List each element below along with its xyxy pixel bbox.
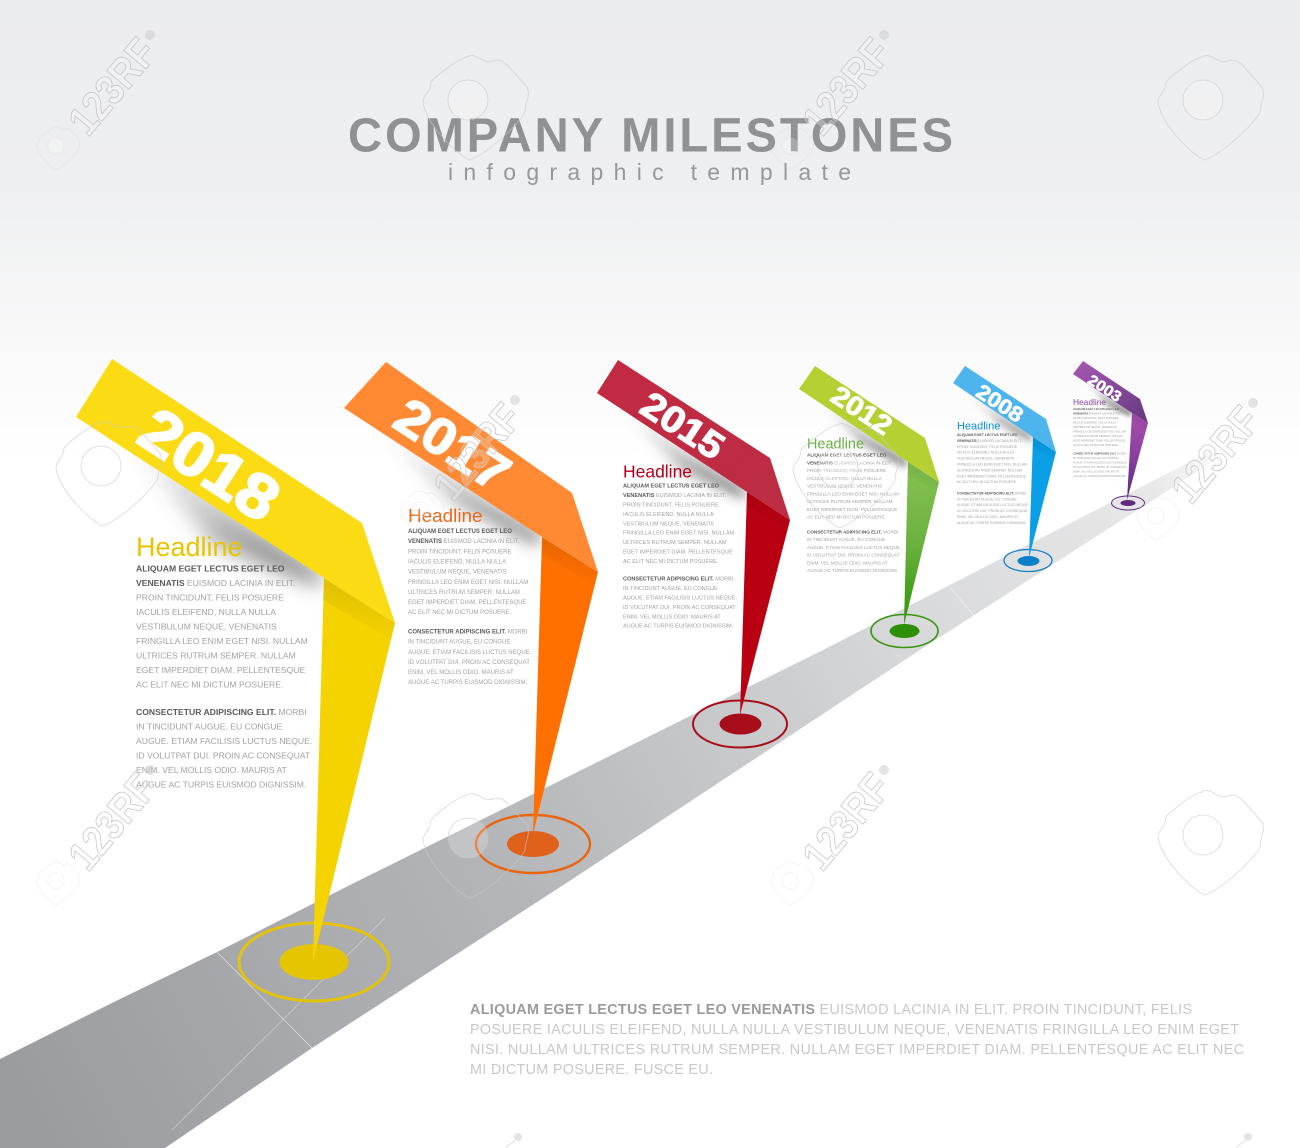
text block 2017: ID VOLUTPAT DUI. PROIN AC CONSEQUAT bbox=[408, 660, 530, 666]
text block 2012: VESTIBULUM NEQUE, VENENATIS bbox=[807, 484, 882, 489]
text block 2003: FRINGILLA LEO ENIM EGET NISI. NULLAM bbox=[1073, 429, 1126, 433]
milestone 2008 bbox=[953, 366, 1056, 572]
text block 2018 bbox=[136, 532, 312, 790]
marker 2018 bbox=[239, 923, 389, 1001]
watermarks: 123RF bbox=[424, 394, 531, 509]
text block 2017: IACULIS ELEIFEND, NULLA NULLA bbox=[408, 559, 506, 565]
text block 2018: IACULIS ELEIFEND, NULLA NULLA bbox=[136, 607, 276, 617]
text block 2017: PROIN TINCIDUNT, FELIS POSUERE bbox=[408, 549, 512, 555]
text block 2017: EGET IMPERDIET DIAM. PELLENTESQUE bbox=[408, 600, 526, 606]
ribbon band 2017 bbox=[344, 362, 598, 572]
year 2017: 2017 bbox=[384, 387, 520, 503]
text block 2017: VENENATIS EUISMOD LACINIA IN ELIT. bbox=[408, 539, 520, 545]
text block 2012: IACULIS ELEIFEND, NULLA NULLA bbox=[807, 476, 883, 481]
text block 2017: IN TINCIDUNT AUGUE, EU CONGUE bbox=[408, 640, 510, 646]
text block 2015: IN TINCIDUNT AUGUE, EU CONGUE bbox=[623, 586, 718, 592]
text block 2008: AUGUE. ETIAM FACILISIS LUCTUS NEQUE. bbox=[957, 503, 1029, 507]
text block 2018: Headline bbox=[136, 532, 243, 562]
text block 2018: VESTIBULUM NEQUE, VENENATIS bbox=[136, 622, 277, 632]
text block 2012: ALIQUAM EGET LECTUS EGET LEO bbox=[807, 453, 887, 458]
text block 2015: Headline bbox=[623, 462, 692, 482]
text block 2018: IN TINCIDUNT AUGUE, EU CONGUE bbox=[136, 722, 283, 732]
text block 2017: CONSECTETUR ADIPISCING ELIT. MORBI bbox=[408, 629, 528, 635]
text block 2018: CONSECTETUR ADIPISCING ELIT. MORBI bbox=[136, 707, 307, 717]
text block 2012: AUGUE AC TURPIS EUISMOD DIGNISSIM. bbox=[807, 568, 898, 573]
road bbox=[0, 453, 1215, 1148]
band shadow 2012 bbox=[820, 402, 908, 467]
text block 2012: ENIM. VEL MOLLIS ODIO. MAURIS AT bbox=[807, 561, 888, 566]
marker 2015 bbox=[693, 700, 787, 748]
milestone 2018 bbox=[76, 359, 395, 1001]
ribbon band 2015 bbox=[597, 360, 790, 520]
text block 2017: ULTRICES RUTRUM SEMPER. NULLAM bbox=[408, 590, 520, 596]
text block 2017: FRINGILLA LEO ENIM EGET NISI. NULLAM bbox=[408, 580, 528, 586]
text block 2018: AUGUE. ETIAM FACILISIS LUCTUS NEQUE. bbox=[136, 736, 312, 746]
band shadow 2008 bbox=[968, 392, 1033, 441]
stem 2012 bbox=[904, 462, 939, 625]
text block 2003: Headline bbox=[1073, 397, 1106, 407]
text block 2015: VESTIBULUM NEQUE, VENENATIS bbox=[623, 521, 714, 527]
band shadow 2003 bbox=[1086, 381, 1132, 416]
stem 2003 bbox=[1127, 413, 1148, 500]
text block 2012: AC ELIT NEC MI DICTUM POSUERE. bbox=[807, 515, 886, 520]
text block 2003: ID VOLUTPAT DUI. PROIN AC CONSEQUAT bbox=[1073, 465, 1127, 469]
text block 2015: EGET IMPERDIET DIAM. PELLENTESQUE bbox=[623, 549, 733, 555]
ribbon band 2012 bbox=[799, 366, 939, 482]
text block 2015: ALIQUAM EGET LECTUS EGET LEO bbox=[623, 484, 720, 490]
year 2012: 2012 bbox=[825, 380, 897, 442]
subtitle: infographic template bbox=[448, 159, 851, 185]
text block 2008: IN TINCIDUNT AUGUE, EU CONGUE bbox=[957, 497, 1017, 501]
text block 2018: ID VOLUTPAT DUI. PROIN AC CONSEQUAT bbox=[136, 750, 311, 760]
milestone 2003 bbox=[1073, 361, 1148, 510]
text block 2012: VENENATIS EUISMOD LACINIA IN ELIT. bbox=[807, 460, 892, 465]
text block 2012: PROIN TINCIDUNT, FELIS POSUERE bbox=[807, 468, 886, 473]
ribbon band 2003 bbox=[1073, 361, 1148, 423]
milestone 2017 bbox=[344, 362, 598, 873]
text block 2012: ID VOLUTPAT DUI. PROIN AC CONSEQUAT bbox=[807, 553, 900, 558]
marker 2008 bbox=[1004, 550, 1052, 572]
ribbon band 2008 bbox=[953, 366, 1056, 452]
text block 2003 bbox=[1073, 397, 1128, 478]
text block 2017: AUGUE. ETIAM FACILISIS LUCTUS NEQUE. bbox=[408, 650, 532, 656]
text block 2003: VESTIBULUM NEQUE, VENENATIS bbox=[1073, 425, 1117, 429]
text block 2012: ULTRICES RUTRUM SEMPER. NULLAM bbox=[807, 499, 893, 504]
text block 2018: ALIQUAM EGET LECTUS EGET LEO bbox=[136, 564, 285, 574]
text block 2008: FRINGILLA LEO ENIM EGET NISI. NULLAM bbox=[957, 463, 1027, 467]
bottom paragraph: MI DICTUM POSUERE. FUSCE EU. bbox=[470, 1062, 713, 1078]
text block 2017: ENIM. VEL MOLLIS ODIO. MAURIS AT bbox=[408, 670, 514, 676]
text block 2015: ENIM. VEL MOLLIS ODIO. MAURIS AT bbox=[623, 614, 721, 620]
text block 2018: ENIM. VEL MOLLIS ODIO. MAURIS AT bbox=[136, 765, 288, 775]
text block 2015: ULTRICES RUTRUM SEMPER. NULLAM bbox=[623, 540, 727, 546]
text block 2003: VENENATIS EUISMOD LACINIA IN ELIT. bbox=[1073, 411, 1123, 415]
marker 2003 bbox=[1112, 496, 1144, 510]
text block 2008: ENIM. VEL MOLLIS ODIO. MAURIS AT bbox=[957, 515, 1019, 519]
text block 2015: CONSECTETUR ADIPISCING ELIT. MORBI bbox=[623, 577, 734, 583]
ribbon band 2018 bbox=[76, 359, 395, 623]
text block 2003: EGET IMPERDIET DIAM. PELLENTESQUE bbox=[1073, 438, 1126, 442]
text block 2015: AUGUE AC TURPIS EUISMOD DIGNISSIM. bbox=[623, 624, 734, 630]
text block 2008: IACULIS ELEIFEND, NULLA NULLA bbox=[957, 451, 1015, 455]
stem 2017 bbox=[533, 537, 598, 834]
year 2008: 2008 bbox=[972, 379, 1028, 427]
text block 2015: AUGUE. ETIAM FACILISIS LUCTUS NEQUE. bbox=[623, 595, 738, 601]
text block 2012: FRINGILLA LEO ENIM EGET NISI. NULLAM bbox=[807, 491, 899, 496]
text block 2017: Headline bbox=[408, 506, 483, 527]
text block 2008: CONSECTETUR ADIPISCING ELIT. MORBI bbox=[957, 491, 1027, 495]
text block 2003: ENIM. VEL MOLLIS ODIO. MAURIS AT bbox=[1073, 469, 1120, 473]
stem 2018 bbox=[313, 578, 395, 962]
text block 2008: ALIQUAM EGET LECTUS EGET LEO bbox=[957, 433, 1018, 437]
text block 2015 bbox=[623, 462, 738, 630]
text block 2017: AC ELIT NEC MI DICTUM POSUERE. bbox=[408, 610, 511, 616]
text block 2008: EGET IMPERDIET DIAM. PELLENTESQUE bbox=[957, 474, 1027, 478]
text block 2018: AUGUE AC TURPIS EUISMOD DIGNISSIM. bbox=[136, 780, 306, 790]
bottom paragraph bbox=[470, 1002, 1244, 1078]
year 2018: 2018 bbox=[127, 394, 292, 535]
band shadow 2015 bbox=[625, 410, 747, 498]
marker 2017 bbox=[476, 815, 590, 873]
text block 2003: AUGUE. ETIAM FACILISIS LUCTUS NEQUE. bbox=[1073, 460, 1128, 464]
text block 2018: ULTRICES RUTRUM SEMPER. NULLAM bbox=[136, 650, 296, 660]
watermarks: 123RF bbox=[793, 764, 900, 879]
marker 2012 bbox=[871, 614, 938, 648]
watermarks: 123RF bbox=[793, 29, 900, 144]
text block 2012 bbox=[807, 436, 901, 573]
bottom paragraph: ALIQUAM EGET LECTUS EGET LEO VENENATIS EUISMOD LACINIA IN ELIT. PROIN TINCIDUNT, FELIS bbox=[470, 1002, 1192, 1018]
text block 2012: CONSECTETUR ADIPISCING ELIT. MORBI bbox=[807, 529, 898, 534]
text block 2003: ULTRICES RUTRUM SEMPER. NULLAM bbox=[1073, 434, 1122, 438]
milestone 2012 bbox=[799, 366, 939, 648]
stem 2015 bbox=[740, 492, 790, 715]
milestone 2015 bbox=[597, 360, 790, 748]
text block 2015: ID VOLUTPAT DUI. PROIN AC CONSEQUAT bbox=[623, 605, 736, 611]
text block 2003: CONSECTETUR ADIPISCING ELIT. MORBI bbox=[1073, 451, 1126, 455]
text block 2017: VESTIBULUM NEQUE, VENENATIS bbox=[408, 570, 507, 576]
text block 2003: ALIQUAM EGET LECTUS EGET LEO bbox=[1073, 407, 1119, 411]
text block 2008 bbox=[957, 421, 1029, 525]
bottom paragraph: NISI. NULLAM ULTRICES RUTRUM SEMPER. NULLAM EGET IMPERDIET DIAM. PELLENTESQUE AC ELIT NEC bbox=[470, 1042, 1244, 1058]
text block 2003: IN TINCIDUNT AUGUE, EU CONGUE bbox=[1073, 456, 1118, 460]
text block 2017: ALIQUAM EGET LECTUS EGET LEO bbox=[408, 529, 512, 535]
band shadow 2017 bbox=[380, 430, 542, 545]
text block 2008: Headline bbox=[957, 421, 1000, 433]
text block 2012: IN TINCIDUNT AUGUE, EU CONGUE bbox=[807, 537, 885, 542]
text block 2003: PROIN TINCIDUNT, FELIS POSUERE bbox=[1073, 416, 1119, 420]
year 2003: 2003 bbox=[1085, 372, 1124, 406]
text block 2015: IACULIS ELEIFEND, NULLA NULLA bbox=[623, 512, 714, 518]
text block 2008: PROIN TINCIDUNT, FELIS POSUERE bbox=[957, 445, 1018, 449]
text block 2008: ID VOLUTPAT DUI. PROIN AC CONSEQUAT bbox=[957, 509, 1029, 513]
text block 2008: AC ELIT NEC MI DICTUM POSUERE. bbox=[957, 480, 1017, 484]
stem 2008 bbox=[1029, 437, 1056, 558]
title: COMPANY MILESTONES bbox=[348, 110, 956, 162]
text block 2003: IACULIS ELEIFEND, NULLA NULLA bbox=[1073, 420, 1116, 424]
text block 2015: FRINGILLA LEO ENIM EGET NISI. NULLAM bbox=[623, 531, 735, 537]
text block 2003: AUGUE AC TURPIS EUISMOD DIGNISSIM. bbox=[1073, 474, 1126, 478]
text block 2015: AC ELIT NEC MI DICTUM POSUERE. bbox=[623, 559, 719, 565]
text block 2008: VESTIBULUM NEQUE, VENENATIS bbox=[957, 457, 1015, 461]
text block 2018: AC ELIT NEC MI DICTUM POSUERE. bbox=[136, 680, 283, 690]
watermarks: 123RF bbox=[59, 764, 166, 879]
text block 2008: AUGUE AC TURPIS EUISMOD DIGNISSIM. bbox=[957, 521, 1026, 525]
text block 2003: AC ELIT NEC MI DICTUM POSUERE. bbox=[1073, 443, 1119, 447]
text block 2018: VENENATIS EUISMOD LACINIA IN ELIT. bbox=[136, 578, 295, 588]
text block 2018: EGET IMPERDIET DIAM. PELLENTESQUE bbox=[136, 665, 305, 675]
text block 2008: ULTRICES RUTRUM SEMPER. NULLAM bbox=[957, 468, 1022, 472]
year 2015: 2015 bbox=[633, 384, 731, 468]
bottom paragraph: POSUERE IACULIS ELEIFEND, NULLA NULLA VESTIBULUM NEQUE, VENENATIS FRINGILLA LEO ENIM EGET bbox=[470, 1022, 1239, 1038]
text block 2012: Headline bbox=[807, 436, 864, 452]
band shadow 2018 bbox=[122, 430, 324, 585]
text block 2017: AUGUE AC TURPIS EUISMOD DIGNISSIM. bbox=[408, 680, 528, 686]
text block 2012: EGET IMPERDIET DIAM. PELLENTESQUE bbox=[807, 507, 897, 512]
text block 2015: VENENATIS EUISMOD LACINIA IN ELIT. bbox=[623, 493, 727, 499]
text block 2018: FRINGILLA LEO ENIM EGET NISI. NULLAM bbox=[136, 636, 308, 646]
watermarks: 123RF bbox=[59, 29, 166, 144]
text block 2012: AUGUE. ETIAM FACILISIS LUCTUS NEQUE. bbox=[807, 545, 901, 550]
text block 2018: PROIN TINCIDUNT, FELIS POSUERE bbox=[136, 592, 284, 602]
watermarks: 123RF bbox=[1162, 397, 1269, 512]
text block 2017 bbox=[408, 506, 532, 686]
text block 2015: PROIN TINCIDUNT, FELIS POSUERE bbox=[623, 502, 719, 508]
text block 2008: VENENATIS EUISMOD LACINIA IN ELIT. bbox=[957, 439, 1022, 443]
